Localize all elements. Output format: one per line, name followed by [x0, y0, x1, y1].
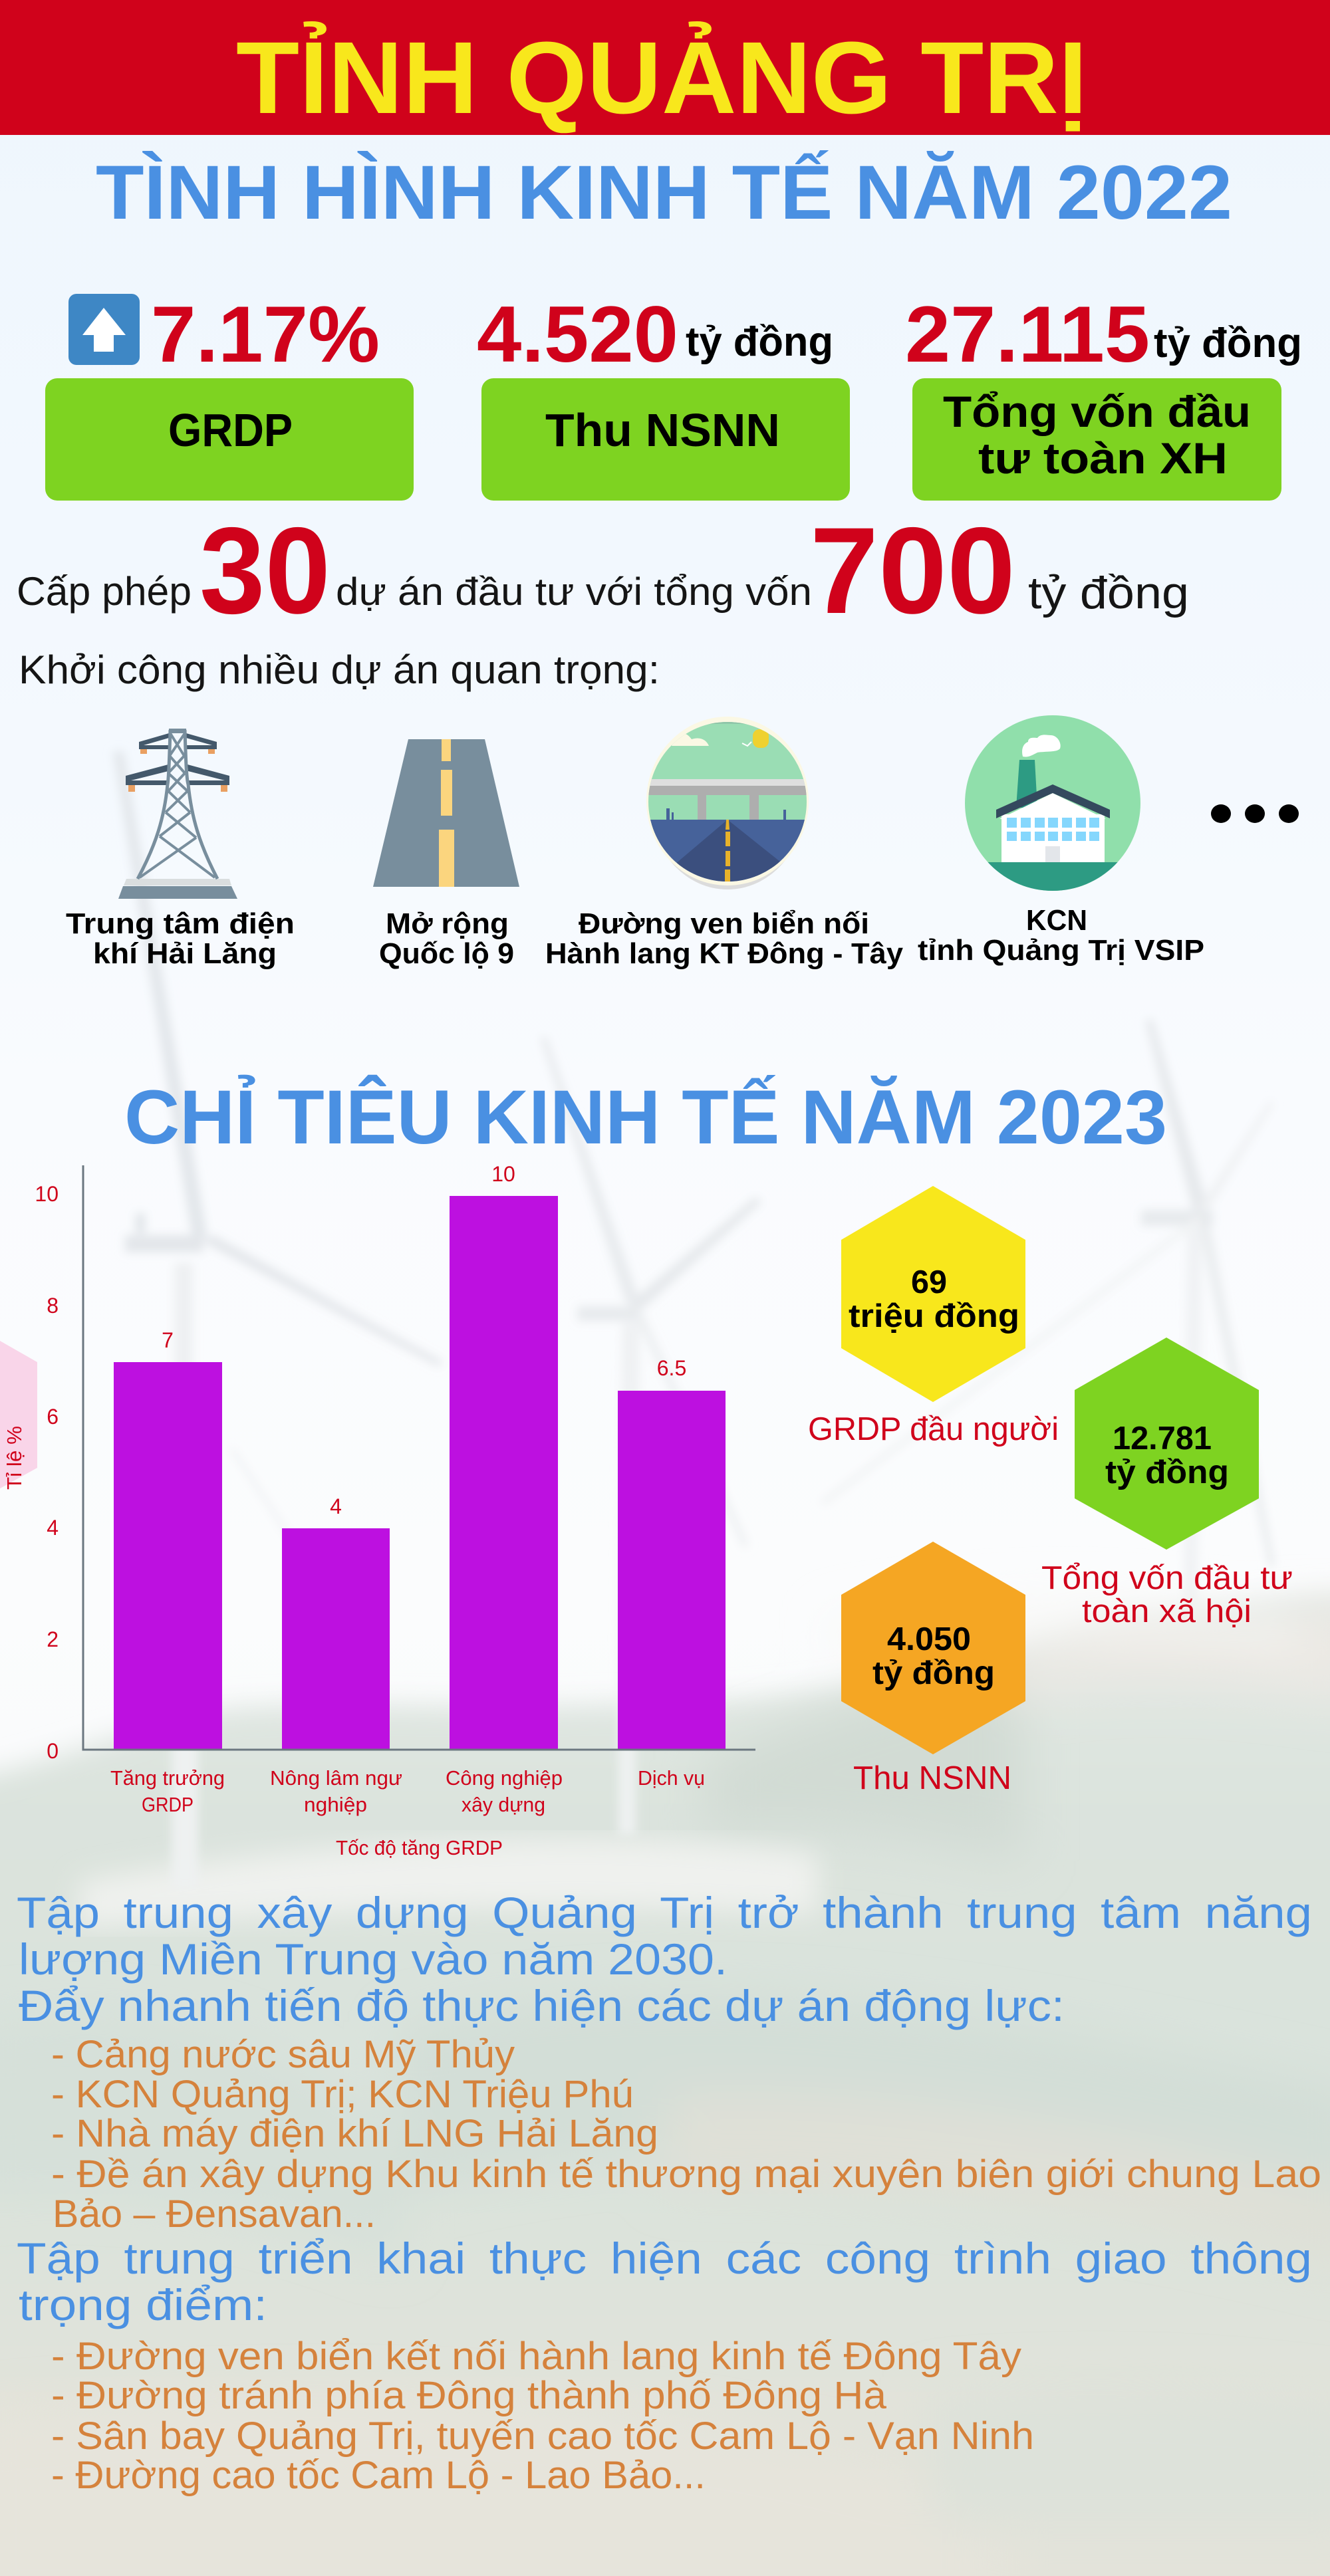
category labels: GRDP [142, 1793, 194, 1816]
title: TỈNH QUẢNG TRỊ [236, 21, 1087, 135]
text block: licensed projects: 30 [200, 503, 331, 640]
y axis title: Tỉ lệ % [3, 1426, 26, 1490]
panel: total social investment stat [905, 290, 1302, 501]
revenue box [481, 378, 850, 501]
category labels: xây dựng [462, 1793, 545, 1816]
text block: 2030 energy centre goal: lượng Miền Trung vào năm 2030. [19, 1934, 728, 1984]
label: power plant: Trung tâm điện [66, 907, 295, 940]
GRDP box [45, 378, 414, 501]
text block: key transport works: Tập trung triển khai thực hiện các công trình giao thông [17, 2234, 1312, 2283]
category labels: Tăng trưởng [110, 1766, 225, 1790]
icon: power tower [118, 729, 237, 899]
value labels: 10 [491, 1162, 515, 1186]
value labels: 4 [330, 1494, 342, 1518]
text block: licensed projects [17, 503, 1189, 640]
text block: 2030 energy centre goal: Tập trung xây dựng Quảng Trị trở thành trung tâm năng [17, 1888, 1312, 1937]
category labels: Dịch vụ [638, 1766, 705, 1790]
label: power plant: khí Hải Lăng [93, 937, 277, 970]
category labels: nghiệp [304, 1793, 367, 1816]
list: driving projects: - Nhà máy điện khí LNG Hải Lăng [51, 2112, 658, 2155]
text block: licensed projects: tỷ đồng [1028, 568, 1189, 618]
axes [83, 1165, 755, 1750]
label: highway 9: Mở rộng [386, 907, 509, 940]
list: driving projects: - KCN Quảng Trị; KCN Triệu Phú [51, 2073, 634, 2116]
x axis title: Tốc độ tăng GRDP [336, 1836, 503, 1859]
panel: GRDP per capita hexagon [808, 1186, 1059, 1447]
bars [114, 1196, 726, 1750]
investment unit: tỷ đồng [1154, 320, 1302, 366]
text block: licensed projects: dự án đầu tư với tổng vốn [336, 570, 812, 614]
label: power plant [66, 907, 295, 970]
revenue value: 4.520 [477, 290, 678, 379]
category labels [110, 1766, 705, 1816]
GRDP value: 7.17% [151, 290, 380, 379]
label: coastal road: Đường ven biển nối [579, 907, 869, 940]
panel: total investment hexagon: tỷ đồng [1105, 1455, 1229, 1490]
label: coastal road: Hành lang KT Đông - Tây [545, 937, 904, 970]
label: coastal road [545, 907, 904, 970]
investment label: tư toàn XH [978, 433, 1228, 483]
text block: key transport works [17, 2234, 1312, 2329]
heading: 2022 economic situation: TÌNH HÌNH KINH TẾ NĂM 2022 [96, 150, 1232, 235]
panel: total investment hexagon [1041, 1338, 1293, 1629]
text block: licensed projects: 700 [810, 503, 1015, 640]
icon: factory circle [964, 715, 1144, 895]
list: transport projects: - Đường ven biển kết nối hành lang kinh tế Đông Tây [51, 2335, 1021, 2378]
revenue unit: tỷ đồng [686, 319, 833, 365]
list: transport projects: - Đường cao tốc Cam Lộ - Lao Bảo... [51, 2454, 706, 2497]
y axis ticks: 2 [47, 1627, 59, 1651]
panel: budget revenue hexagon: tỷ đồng [872, 1655, 995, 1691]
heading: 2023 economic targets: CHỈ TIÊU KINH TẾ NĂM 2023 [124, 1074, 1167, 1160]
caption: total investment [1041, 1560, 1293, 1629]
list: driving projects: - Cảng nước sâu Mỹ Thủy [51, 2033, 515, 2076]
list: driving projects [51, 2033, 1321, 2236]
list: transport projects: - Đường tránh phía Đông thành phố Đông Hà [51, 2374, 887, 2417]
investment value: 27.115 [905, 290, 1150, 379]
list: transport projects: - Sân bay Quảng Trị, tuyến cao tốc Cam Lộ - Vạn Ninh [51, 2414, 1034, 2458]
investment label [943, 387, 1251, 483]
icon: ellipsis dots [1211, 804, 1299, 823]
label: VSIP industrial park [918, 904, 1204, 967]
GRDP label: GRDP [168, 404, 293, 456]
category labels: Công nghiệp [446, 1766, 563, 1790]
title banner [0, 0, 1330, 135]
panel: GRDP per capita hexagon: triệu đồng [849, 1298, 1019, 1334]
caption: total investment: Tổng vốn đầu tư [1041, 1560, 1293, 1596]
panel: total investment hexagon: 12.781 [1113, 1421, 1212, 1457]
value labels: 6.5 [657, 1356, 686, 1380]
icon: up arrow [68, 294, 140, 365]
label: highway 9: Quốc lộ 9 [379, 937, 514, 970]
decoration: pink hexagon fragment [0, 1341, 37, 1488]
caption: GRDP per capita: GRDP đầu người [808, 1411, 1059, 1447]
icon: road [373, 739, 519, 887]
y axis ticks: 8 [47, 1294, 59, 1318]
icon: coastal road circle [645, 717, 811, 889]
label: VSIP industrial park: KCN [1026, 904, 1087, 937]
caption: total investment: toàn xã hội [1082, 1593, 1252, 1629]
value labels [162, 1162, 686, 1518]
panel: state budget revenue stat [477, 290, 850, 501]
label: highway 9 [379, 907, 514, 970]
investment label: Tổng vốn đầu [943, 387, 1251, 436]
panel: GRDP stat [45, 290, 414, 501]
panel: budget revenue hexagon: 4.050 [887, 1621, 971, 1657]
text block: key transport works: trọng điểm: [19, 2280, 267, 2329]
label: VSIP industrial park: tỉnh Quảng Trị VSIP [918, 934, 1204, 967]
text block: projects started: Khởi công nhiều dự án quan trọng: [19, 647, 660, 692]
y axis ticks: 4 [47, 1516, 59, 1540]
text block: licensed projects: Cấp phép [17, 569, 192, 614]
y axis ticks [35, 1182, 59, 1763]
bar chart: GRDP growth rate [3, 1162, 755, 1859]
text block: 2030 energy centre goal [17, 1888, 1312, 2030]
category labels: Nông lâm ngư [270, 1766, 402, 1790]
list: driving projects: - Đề án xây dựng Khu kinh tế thương mại xuyên biên giới chung Lao [51, 2153, 1321, 2196]
y axis ticks: 6 [47, 1405, 59, 1429]
value labels: 7 [162, 1328, 174, 1352]
list: transport projects [51, 2335, 1034, 2497]
caption: budget revenue: Thu NSNN [853, 1760, 1011, 1796]
y axis ticks: 0 [47, 1739, 59, 1763]
panel: GRDP per capita hexagon: 69 [911, 1264, 947, 1300]
investment box [912, 378, 1281, 501]
list: driving projects: Bảo – Đensavan... [53, 2192, 376, 2236]
panel: budget revenue hexagon [841, 1542, 1025, 1796]
revenue label: Thu NSNN [545, 404, 780, 456]
y axis ticks: 10 [35, 1182, 59, 1206]
text block: 2030 energy centre goal: Đẩy nhanh tiến độ thực hiện các dự án động lực: [19, 1981, 1065, 2030]
